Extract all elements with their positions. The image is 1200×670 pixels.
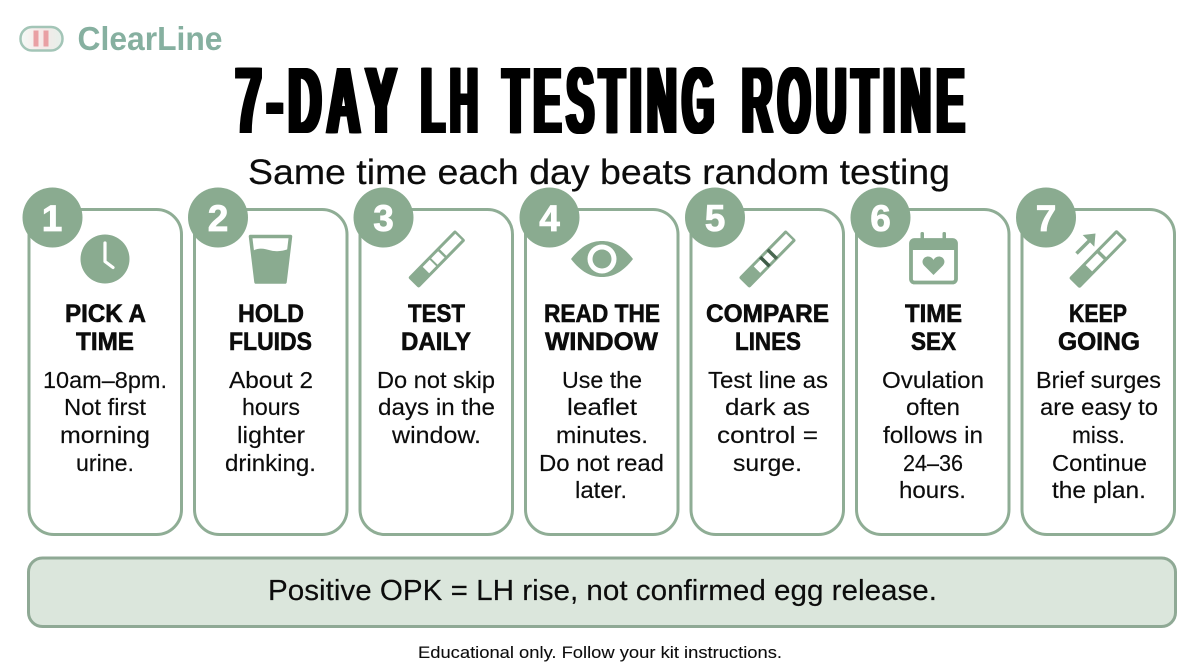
icon: glass of water bbox=[250, 236, 290, 282]
body text bbox=[539, 367, 664, 503]
badge 3 bbox=[354, 188, 414, 248]
body text: Continue bbox=[1052, 450, 1147, 476]
body text: 10am–8pm. bbox=[43, 367, 167, 393]
heading: SEX bbox=[911, 328, 956, 356]
body text: Ovulation bbox=[882, 367, 984, 393]
body text: often bbox=[906, 394, 960, 420]
body text bbox=[708, 367, 828, 476]
heading bbox=[706, 300, 829, 356]
heading bbox=[905, 300, 962, 356]
body text: About 2 bbox=[229, 367, 313, 393]
body text: control = bbox=[717, 422, 818, 448]
badge 5: 5 bbox=[705, 198, 725, 239]
heading: WINDOW bbox=[545, 328, 658, 356]
body text: surge. bbox=[733, 450, 802, 476]
heading: GOING bbox=[1058, 328, 1140, 356]
body text bbox=[225, 367, 316, 476]
heading: TIME bbox=[905, 300, 962, 328]
panel: step 2 hold fluids bbox=[188, 188, 347, 534]
panel: step 5 compare lines bbox=[685, 188, 844, 534]
logo: ClearLine bbox=[20, 20, 222, 57]
body text: Test line as bbox=[708, 367, 828, 393]
panel: step 4 read the window bbox=[520, 188, 678, 534]
icon: eye bbox=[571, 241, 633, 277]
body text bbox=[43, 367, 167, 476]
icon: test strip with two dark lines bbox=[739, 230, 796, 288]
heading: TIME bbox=[76, 328, 134, 356]
body text: morning bbox=[60, 422, 150, 448]
body text bbox=[882, 367, 984, 503]
body text bbox=[1036, 367, 1161, 503]
body text: hours. bbox=[899, 477, 966, 503]
body text: miss. bbox=[1072, 422, 1125, 448]
heading bbox=[401, 300, 471, 356]
badge 6 bbox=[850, 188, 910, 248]
badge 4: 4 bbox=[539, 198, 560, 239]
body text: window. bbox=[391, 422, 481, 448]
heading: TEST bbox=[408, 300, 465, 328]
body text: lighter bbox=[237, 422, 305, 448]
body text: drinking. bbox=[225, 450, 316, 476]
body text: minutes. bbox=[556, 422, 648, 448]
body text: Do not read bbox=[539, 450, 664, 476]
body text bbox=[377, 367, 495, 448]
heading bbox=[544, 300, 660, 356]
icon: test strip pill bbox=[20, 27, 62, 50]
badge 1 bbox=[22, 188, 82, 248]
heading: LINES bbox=[735, 328, 801, 356]
badge 2 bbox=[188, 188, 248, 248]
title: LH bbox=[421, 48, 483, 154]
panel: step 6 time sex bbox=[850, 188, 1009, 534]
title: ROUTINE bbox=[742, 48, 970, 154]
badge 7 bbox=[1016, 188, 1076, 248]
badge 2: 2 bbox=[208, 198, 228, 239]
title bbox=[235, 48, 970, 154]
badge 7: 7 bbox=[1036, 198, 1056, 239]
body text: Not first bbox=[64, 394, 147, 420]
body text: 24–36 bbox=[903, 450, 963, 476]
body text: follows in bbox=[883, 422, 983, 448]
body text: dark as bbox=[725, 394, 810, 420]
body text: days in the bbox=[378, 394, 495, 420]
icon: calendar with heart bbox=[910, 232, 957, 282]
body text: hours bbox=[242, 394, 300, 420]
panel: step 3 test daily bbox=[354, 188, 512, 534]
title: 7-DAY bbox=[236, 48, 402, 154]
icon: clock bbox=[80, 234, 130, 284]
panel: step 7 keep going bbox=[1016, 188, 1174, 534]
callout: positive OPK note: Positive OPK = LH rise, not confirmed egg release. bbox=[268, 575, 937, 607]
body text: are easy to bbox=[1040, 394, 1158, 420]
badge 1: 1 bbox=[42, 198, 62, 239]
panel: step 1 pick a time bbox=[22, 188, 182, 534]
heading bbox=[229, 300, 312, 356]
heading: DAILY bbox=[401, 328, 471, 356]
heading: COMPARE bbox=[706, 300, 829, 328]
body text: urine. bbox=[76, 450, 134, 476]
heading: READ THE bbox=[544, 300, 660, 328]
body text: the plan. bbox=[1052, 477, 1146, 503]
heading: PICK A bbox=[65, 300, 146, 328]
body text: later. bbox=[575, 477, 627, 503]
icon: test strip with rising arrow bbox=[1069, 229, 1127, 289]
badge 3: 3 bbox=[373, 198, 394, 239]
heading: HOLD bbox=[238, 300, 304, 328]
body text: Use the bbox=[562, 367, 642, 393]
heading: KEEP bbox=[1069, 300, 1127, 328]
body text: Do not skip bbox=[377, 367, 495, 393]
heading bbox=[65, 300, 146, 356]
footer note: Educational only. Follow your kit instructions. bbox=[418, 644, 782, 662]
badge 4 bbox=[520, 188, 580, 248]
subtitle: Same time each day beats random testing bbox=[248, 153, 950, 192]
body text: leaflet bbox=[567, 394, 638, 420]
icon: test strip bbox=[408, 230, 466, 288]
badge 5 bbox=[685, 188, 745, 248]
logo wordmark: ClearLine bbox=[78, 20, 222, 57]
title: TESTING bbox=[503, 48, 720, 154]
body text: Brief surges bbox=[1036, 367, 1161, 393]
heading: FLUIDS bbox=[229, 328, 312, 356]
callout: positive OPK note bbox=[28, 558, 1176, 626]
heading bbox=[1058, 300, 1140, 356]
badge 6: 6 bbox=[870, 198, 891, 239]
